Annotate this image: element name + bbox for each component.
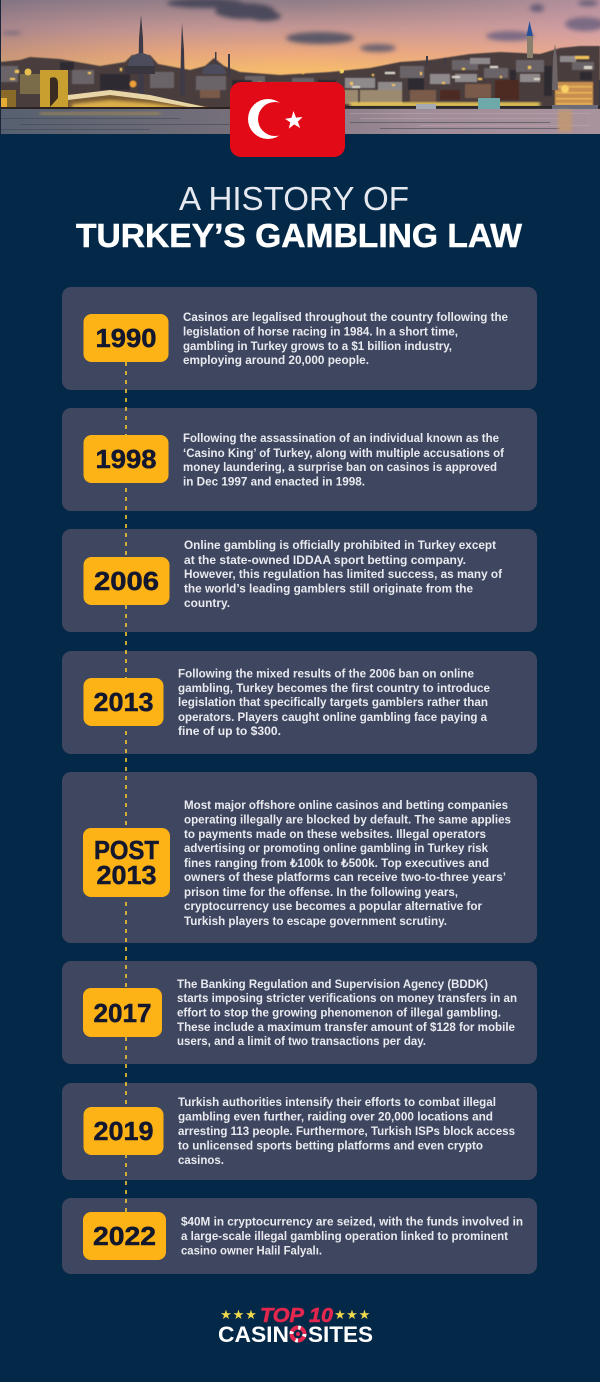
text: 2017 description	[177, 978, 517, 1048]
text: 2013 description: legislation that specifically targets gamblers rather than	[178, 696, 488, 709]
text: 2006 description: the world’s leading gamblers still originate from the	[184, 582, 474, 596]
text: 2013 description: gambling, Turkey becomes the first country to introduce	[178, 682, 491, 695]
text: 2013 description	[178, 668, 491, 738]
logo: casino wordmark: CASIN	[218, 1322, 289, 1347]
year badge: 2017	[83, 988, 162, 1037]
logo stars: ★	[334, 1307, 346, 1322]
text: 2013 description: Following the mixed results of the 2006 ban on online	[178, 668, 475, 680]
text: post 2013 description: owners of these platforms can receive two-to-three years’	[184, 871, 506, 884]
mosques and minarets	[125, 15, 558, 95]
panel: 2006	[62, 529, 537, 632]
text: 2017 description: users, and a limit of two transactions per day.	[177, 1035, 426, 1048]
water	[0, 109, 600, 134]
logo stars: ★	[245, 1307, 257, 1322]
text: 2006 description	[184, 539, 502, 610]
lit windows	[10, 56, 589, 95]
logo: top 10 wordmark: TOP 10	[260, 1305, 333, 1327]
text: 2013 description: fine of up to $300.	[178, 725, 281, 738]
water reflections	[0, 110, 590, 132]
year badge: 2017: 2017	[94, 998, 152, 1028]
clouds	[2, 0, 600, 52]
text: 2022 description: casino owner Halil Falyalı.	[181, 1244, 322, 1258]
panel: 2019	[62, 1083, 537, 1180]
city mass	[0, 46, 600, 112]
title: A HISTORY OF	[179, 180, 409, 217]
text: 2006 description: However, this regulation has limited success, as many of	[184, 568, 502, 581]
text: post 2013 description	[184, 799, 511, 928]
year badge: 2019: 2019	[94, 1116, 154, 1146]
panel: 2017	[62, 961, 537, 1064]
panel: 2022	[62, 1198, 537, 1274]
text: 2019 description: Turkish authorities intensify their efforts to combat illegal	[178, 1096, 496, 1109]
year badge: 1990: 1990	[96, 323, 156, 353]
text: 2006 description: at the state-owned IDDAA sport betting company.	[184, 554, 466, 567]
shoreline	[0, 107, 230, 112]
text: post 2013 description: cryptocurrency use becomes a popular alternative for	[184, 900, 482, 913]
text: post 2013 description: operating illegally are blocked by default. The same applies	[184, 814, 511, 826]
golden bridge and shore lights	[0, 68, 569, 120]
text: 2017 description: effort to stop the growing phenomenon of illegal gambling.	[177, 1006, 501, 1020]
text: 2022 description	[181, 1216, 523, 1258]
logo stars	[220, 1307, 370, 1322]
text: post 2013 description: fines ranging from ₺100k to ₺500k. Top executives and	[184, 857, 489, 870]
text: 2006 description: Online gambling is officially prohibited in Turkey except	[184, 539, 496, 552]
text: post 2013 description: Most major offshore online casinos and betting companies	[184, 799, 508, 812]
text: 2013 description: operators. Players caught online gambling face paying a	[178, 711, 488, 724]
year badge: post 2013	[83, 828, 170, 897]
year badge: 2022: 2022	[93, 1221, 156, 1251]
panel: 1998	[62, 408, 537, 511]
year badge: 2013	[84, 678, 164, 726]
text: 2017 description: The Banking Regulation and Supervision Agency (BDDK)	[177, 978, 488, 991]
year badge: 1990	[84, 314, 168, 362]
text: 2019 description	[178, 1096, 515, 1167]
panel: post 2013	[62, 772, 537, 943]
text: 2017 description: starts imposing stricter verifications on money transfers in an	[177, 992, 517, 1005]
year badge: 2006	[84, 557, 170, 605]
text: 1998 description	[183, 432, 504, 488]
header photo: Istanbul skyline at dusk	[0, 0, 600, 134]
text: 1998 description: money laundering, a surprise ban on casinos is approved	[183, 461, 497, 474]
text: 2017 description: These include a maximum transfer amount of $128 for mobile	[177, 1021, 516, 1034]
text: 2019 description: arresting 113 people. Furthermore, Turkish ISPs block access	[178, 1125, 515, 1138]
year badge: post 2013: 2013	[96, 860, 156, 890]
icon: poker chip	[292, 1328, 304, 1340]
text: 1990 description: Casinos are legalised throughout the country following the	[183, 311, 509, 324]
flag badge	[230, 82, 345, 157]
text: 2022 description: a large-scale illegal gambling operation linked to prominent	[181, 1230, 508, 1243]
year badge: 2006: 2006	[94, 566, 159, 596]
logo: Top 10 Casino Sites	[218, 1305, 373, 1347]
text: 2019 description: to unlicensed sports betting platforms and even crypto	[178, 1140, 483, 1152]
text: 1990 description: legislation of horse racing in 1984. In a short time,	[183, 326, 458, 338]
year badge: 1998	[84, 435, 168, 483]
year badge: 1998: 1998	[96, 444, 156, 474]
text: 1998 description: in Dec 1997 and enacted in 1998.	[183, 476, 365, 488]
year badge: 2022	[83, 1212, 166, 1260]
text: 1998 description: Following the assassination of an individual known as the	[183, 432, 500, 445]
Galata tower	[526, 21, 533, 58]
year badge: 2013: 2013	[94, 687, 154, 717]
panel: 1990	[62, 287, 537, 390]
text: post 2013 description: prison time for the offense. In the following years,	[184, 886, 458, 899]
sky	[0, 0, 600, 80]
text: 1990 description: gambling in Turkey grows to a $1 billion industry,	[183, 340, 452, 353]
logo: sites wordmark: SITES	[308, 1322, 373, 1347]
text: 2006 description: country.	[184, 597, 230, 610]
logo stars: ★	[346, 1307, 358, 1322]
text: post 2013 description: advertising or promoting online gambling in Turkey risk	[184, 842, 489, 855]
logo stars: ★	[220, 1307, 232, 1322]
title	[76, 180, 523, 254]
boats	[416, 98, 598, 110]
logo stars: ★	[359, 1307, 370, 1322]
text: 2019 description: gambling even further, raiding over 20,000 locations and	[178, 1110, 493, 1124]
text: post 2013 description: to payments made on these websites. Illegal operators	[184, 828, 486, 841]
year badge: 2019	[84, 1107, 164, 1155]
title: TURKEY’S GAMBLING LAW	[76, 217, 523, 254]
icon: star	[285, 111, 302, 129]
timeline dashed connector	[125, 362, 127, 1212]
text: post 2013 description: Turkish players to escape government scrutiny.	[184, 915, 447, 928]
text: 2022 description: $40M in cryptocurrency are seized, with the funds involved in	[181, 1216, 523, 1228]
text: 2019 description: casinos.	[178, 1154, 224, 1167]
text: 1990 description	[183, 311, 509, 367]
year badge: post 2013: POST	[94, 835, 159, 865]
logo stars: ★	[233, 1307, 244, 1322]
text: 1998 description: ‘Casino King’ of Turkey, along with multiple accusations of	[183, 447, 504, 460]
panel: 2013	[62, 651, 537, 754]
text: 1990 description: employing around 20,000 people.	[183, 354, 369, 367]
buildings: grey and stone	[0, 60, 594, 90]
icon: crescent	[248, 99, 292, 139]
